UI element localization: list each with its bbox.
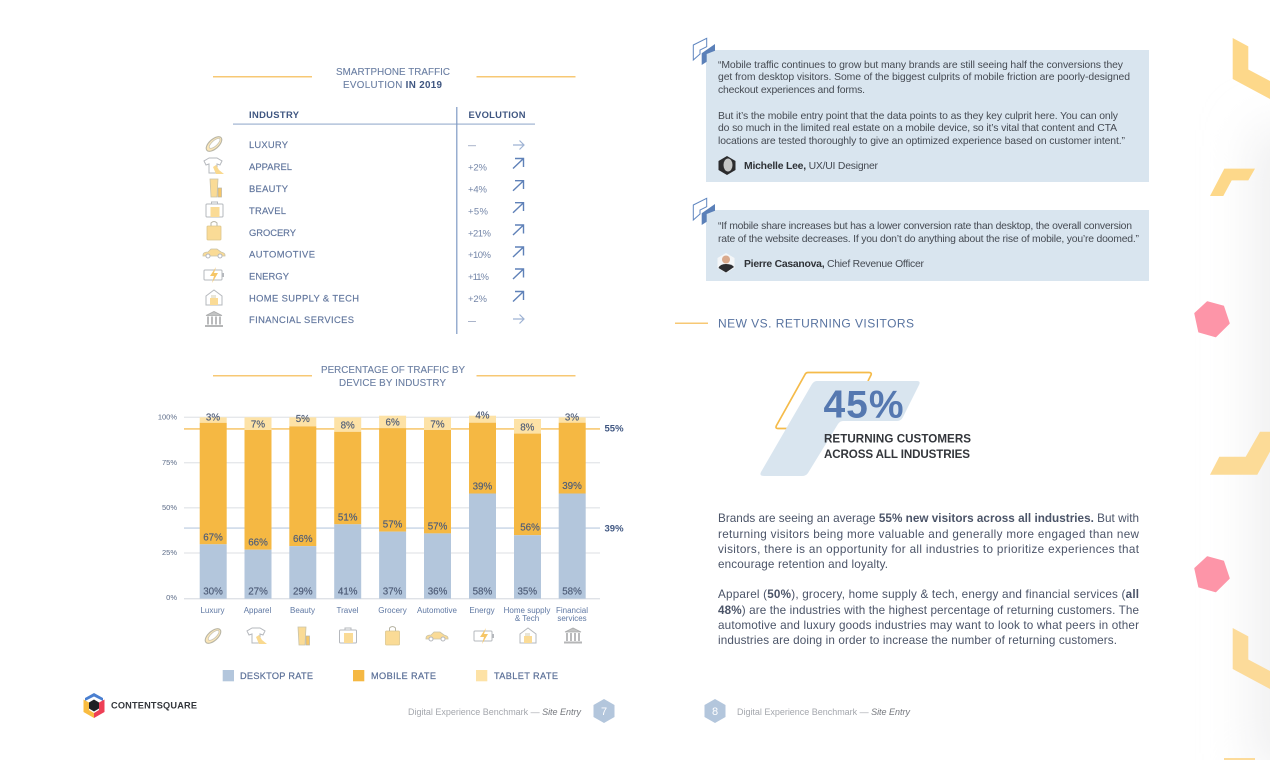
chart legend: TABLET RATE: [494, 671, 558, 681]
footer: page 7: [408, 699, 614, 723]
bar: automotive: Automotive: [417, 606, 458, 615]
row: home supply and tech: [206, 290, 524, 305]
quote text: rate of the website decreases. If you don’t do anything about the rise of mobile, you’re doomed.”: [718, 234, 1140, 245]
row: luxury: –: [468, 140, 477, 151]
chart axis and gridlines: 25%: [162, 548, 177, 557]
quote text: [718, 221, 1140, 245]
row: home supply and tech: +2%: [468, 294, 488, 305]
row: home supply and tech: HOME SUPPLY & TECH: [249, 292, 359, 304]
row: financial services: –: [468, 316, 477, 326]
quote panel: Pierre Casanova: [693, 198, 1149, 281]
row: travel: TRAVEL: [249, 205, 286, 216]
bar: financial services: 3%: [565, 413, 579, 424]
quote text: [718, 60, 1130, 147]
quote text: locations are tested thoroughly to give an optimized experience based on customer intent.”: [718, 136, 1126, 147]
row: grocery: +21%: [468, 228, 492, 240]
quote text: But it’s the mobile entry point that the data points to as they key culprit here. You can only: [718, 111, 1119, 122]
bar: apparel: [244, 417, 272, 644]
row: automotive: [203, 247, 524, 261]
heading: percentage of traffic by device: PERCENTAGE OF TRAFFIC BY: [321, 365, 465, 376]
bar: financial services: Financial: [556, 606, 588, 615]
footer: page 7: 7: [601, 706, 607, 718]
paragraph: returning customers by industry: industries are doing in order to increase the number of returning customers.: [718, 634, 1117, 647]
chart legend: [223, 670, 558, 681]
row: grocery: GROCERY: [249, 227, 297, 238]
table header: [233, 107, 535, 334]
paragraph: new visitors: returning visitors being more valuable and generally more engaged than new: [718, 528, 1140, 541]
paragraph: returning customers by industry: automotive and luxury goods industries may want to look to what peers in other: [718, 619, 1139, 632]
bar: automotive: 36%: [428, 586, 448, 598]
row: energy: [204, 267, 524, 283]
bar: financial services: [556, 413, 588, 644]
row: automotive: AUTOMOTIVE: [249, 248, 315, 260]
stacked bar chart: traffic by device by industry: [158, 411, 624, 646]
callout text: [824, 432, 971, 461]
bar: travel: 8%: [341, 421, 355, 432]
bar: luxury: 30%: [203, 586, 223, 598]
chart axis and gridlines: 50%: [162, 503, 177, 512]
bar: luxury: 67%: [203, 532, 223, 543]
bar: apparel: 27%: [248, 586, 268, 598]
row: financial services: [205, 312, 524, 327]
logo: contentsquare: [84, 693, 197, 718]
table header: EVOLUTION: [468, 109, 526, 120]
bar: grocery: Grocery: [378, 606, 407, 615]
footer: page 7: Digital Experience Benchmark — Site Entry: [408, 707, 582, 717]
row: travel: +5%: [468, 206, 489, 218]
decorative right side shapes: [1195, 38, 1270, 760]
chart axis and gridlines: 0%: [166, 593, 177, 602]
paragraph: returning customers by industry: [718, 588, 1139, 647]
stat callout: 45% returning customers: [760, 372, 971, 476]
table: smartphone traffic evolution: [203, 107, 535, 334]
bar: financial services: services: [557, 614, 587, 623]
paragraph: returning customers by industry: 48%) are the industries with the highest percentage of returning customers. The: [718, 604, 1139, 617]
quote text: get from desktop visitors. Some of the biggest culprits of mobile friction are poorly-designed: [718, 72, 1130, 83]
chart legend: MOBILE RATE: [371, 671, 436, 681]
bar: energy: Energy: [469, 606, 495, 615]
callout background shape: [760, 381, 920, 476]
chart axis and gridlines: 75%: [162, 458, 177, 467]
row: grocery: [207, 222, 524, 240]
row: automotive: +10%: [468, 250, 492, 261]
bar: grocery: [378, 416, 407, 645]
bar: beauty: [289, 414, 316, 645]
reference line: 39%: 39%: [604, 524, 624, 534]
bar: energy: 58%: [473, 586, 492, 598]
paragraph: new visitors: visitors, there is an opportunity for all industries to prioritize experiences that: [718, 543, 1140, 556]
callout outline shape: [776, 372, 871, 428]
row: financial services: FINANCIAL SERVICES: [249, 314, 354, 325]
table header: INDUSTRY: [249, 109, 300, 120]
chart axis and gridlines: [158, 412, 600, 602]
icon: quote mark: [693, 38, 715, 65]
bar: financial services: 39%: [562, 481, 582, 492]
bar: beauty: Beauty: [290, 606, 315, 615]
row: travel: [206, 202, 524, 218]
quote text: do so much in the limited real estate on a mobile device, so it’s vital that content and CTA: [718, 123, 1117, 134]
bar: luxury: 3%: [206, 412, 220, 424]
attribution: Michelle Lee, UX/UI Designer: [744, 161, 879, 172]
bar: energy: 4%: [475, 411, 490, 422]
paragraph: new visitors: Brands are seeing an average 55% new visitors across all industries. But with: [718, 512, 1139, 525]
bar: home supply and tech: Home supply: [504, 606, 550, 615]
footer: page 8: Digital Experience Benchmark — Site Entry: [737, 707, 910, 717]
bar: home supply and tech: [504, 419, 550, 643]
bar: home supply and tech: & Tech: [515, 614, 539, 623]
heading: percentage of traffic by device: DEVICE BY INDUSTRY: [339, 378, 446, 389]
bar: travel: Travel: [337, 606, 359, 615]
row: energy: +11%: [468, 272, 490, 283]
logo: contentsquare: CONTENTSQUARE: [111, 700, 197, 710]
row: apparel: APPAREL: [249, 161, 292, 172]
bar: automotive: 57%: [428, 521, 448, 532]
bar: grocery: 6%: [386, 417, 400, 428]
chart legend: DESKTOP RATE: [240, 671, 313, 681]
row: energy: ENERGY: [249, 270, 290, 282]
bar: automotive: 7%: [430, 420, 445, 430]
row: luxury: [204, 134, 524, 154]
row: beauty: +4%: [468, 184, 488, 196]
bar: energy: [469, 411, 496, 644]
icon: quote mark: [693, 198, 715, 225]
footer: page 8: 8: [712, 706, 718, 718]
row: luxury: LUXURY: [249, 139, 289, 150]
paragraph: new visitors: [718, 512, 1140, 571]
bar: luxury: Luxury: [200, 606, 225, 615]
bar: home supply and tech: 56%: [520, 523, 540, 534]
bar: home supply and tech: 8%: [520, 422, 535, 433]
bar: energy: 39%: [473, 482, 492, 493]
bar: automotive: [417, 417, 458, 641]
paragraph: returning customers by industry: Apparel (50%), grocery, home supply & tech, energy and financial services (all: [718, 588, 1139, 601]
quote text: “Mobile traffic continues to grow but many brands are still seeing half the conversions they: [718, 60, 1124, 71]
bar: grocery: 57%: [383, 519, 403, 530]
row: beauty: [210, 179, 524, 197]
quote text: checkout experiences and forms.: [718, 85, 865, 96]
row: beauty: BEAUTY: [249, 183, 289, 194]
quote panel: Michelle Lee: [693, 38, 1149, 182]
attribution: Pierre Casanova, Chief Revenue Officer: [744, 259, 925, 270]
heading: new vs returning visitors: NEW VS. RETURNING VISITORS: [718, 316, 914, 330]
bar: grocery: 37%: [383, 586, 403, 598]
row: apparel: +2%: [468, 162, 488, 174]
reference line: 55%: 55%: [604, 424, 624, 434]
callout text: RETURNING CUSTOMERS: [824, 432, 971, 446]
bar: apparel: 66%: [248, 537, 268, 548]
bar: beauty: 66%: [293, 534, 313, 545]
bar: travel: 51%: [338, 512, 358, 523]
bar: beauty: 29%: [293, 586, 313, 598]
bar: apparel: Apparel: [244, 606, 272, 615]
bar: travel: 41%: [338, 586, 358, 598]
callout text: ACROSS ALL INDUSTRIES: [824, 448, 970, 461]
callout number: 45%: [824, 384, 904, 426]
bar: luxury: [200, 412, 227, 646]
avatar: Michelle Lee: [718, 156, 736, 175]
chart axis and gridlines: 100%: [158, 412, 177, 422]
avatar: Pierre Casanova: [718, 253, 734, 273]
bar: home supply and tech: 35%: [517, 586, 537, 598]
quote text: “If mobile share increases but has a lower conversion rate than desktop, the overall conversion: [718, 221, 1132, 232]
heading: percentage of traffic by device: [213, 365, 576, 389]
row: apparel: [204, 158, 524, 174]
heading: smartphone traffic evolution: SMARTPHONE TRAFFIC: [336, 67, 450, 78]
footer: page 8: [704, 699, 910, 723]
bar: apparel: 7%: [251, 420, 265, 430]
paragraph: new visitors: encourage retention and loyalty.: [718, 558, 888, 571]
heading: smartphone traffic evolution: EVOLUTION IN 2019: [343, 80, 443, 91]
heading: smartphone traffic evolution: [213, 67, 576, 91]
bar: financial services: 58%: [562, 586, 582, 598]
bar: beauty: 5%: [296, 414, 310, 425]
bar: travel: [334, 417, 361, 643]
